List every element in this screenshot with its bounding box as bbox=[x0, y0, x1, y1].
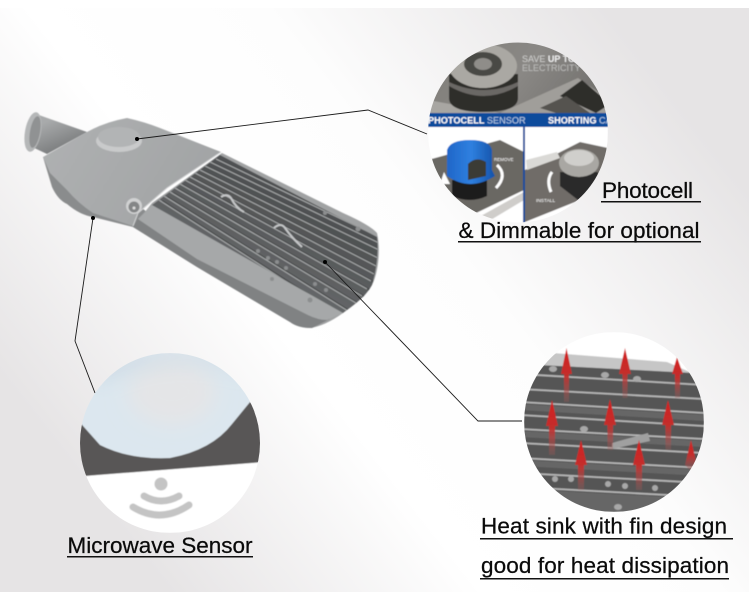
fin ridge detail bbox=[612, 433, 650, 449]
sensor dome bbox=[76, 353, 264, 458]
dome top shading bbox=[120, 362, 135, 370]
divider bbox=[523, 127, 525, 224]
product photo: SAVE UP TO bbox=[522, 54, 575, 64]
product photo bbox=[428, 42, 610, 113]
mounting pipe bbox=[22, 111, 87, 154]
bosses bbox=[549, 366, 658, 510]
label: dimmable for optional: & Dimmable for optional bbox=[458, 218, 700, 243]
fin rows bbox=[520, 374, 704, 497]
detail circle: heat sink with arrows bbox=[520, 332, 708, 512]
housing top cover bbox=[43, 118, 221, 226]
right panel: shorting cap: INSTALL bbox=[536, 198, 555, 204]
heat sink fins bbox=[152, 155, 382, 317]
dome highlight bbox=[146, 378, 196, 390]
product photo: ELECTRICITY bbox=[522, 63, 581, 73]
wave icon bbox=[133, 478, 189, 515]
blue header band bbox=[428, 113, 618, 127]
leader line: heat sink bbox=[323, 260, 522, 421]
housing edge bbox=[555, 332, 689, 372]
housing underside bbox=[43, 157, 150, 227]
left panel: photocell sensor: REMOVE bbox=[494, 157, 514, 162]
label: photocell: Photocell bbox=[602, 178, 693, 203]
right panel: shorting cap bbox=[525, 142, 608, 222]
detail circle: microwave sensor bbox=[76, 353, 264, 533]
left panel: photocell sensor bbox=[428, 140, 524, 224]
label: good for heat dissipation: good for heat dissipation bbox=[481, 553, 729, 578]
photocell socket cap bbox=[96, 127, 142, 152]
street light fixture bbox=[22, 111, 382, 328]
sensor screw bbox=[126, 198, 142, 214]
leader line: photocell bbox=[135, 110, 427, 141]
label: heat sink with fin design: Heat sink with fin design bbox=[481, 514, 727, 538]
leader line: microwave sensor bbox=[75, 216, 95, 393]
lens body bbox=[133, 153, 379, 328]
dark housing band bbox=[76, 402, 264, 476]
blue header band: PHOTOCELL SENSOR bbox=[428, 116, 526, 126]
label: microwave sensor: Microwave Sensor bbox=[68, 533, 253, 558]
lower body edge bbox=[133, 219, 330, 328]
side strip bbox=[138, 205, 343, 320]
blue header band: SHORTING CAP bbox=[548, 116, 618, 126]
fin texture bbox=[520, 404, 704, 512]
detail circle: photocell bbox=[428, 42, 618, 224]
heat arrows bbox=[546, 348, 697, 490]
rim highlight bbox=[133, 152, 221, 226]
